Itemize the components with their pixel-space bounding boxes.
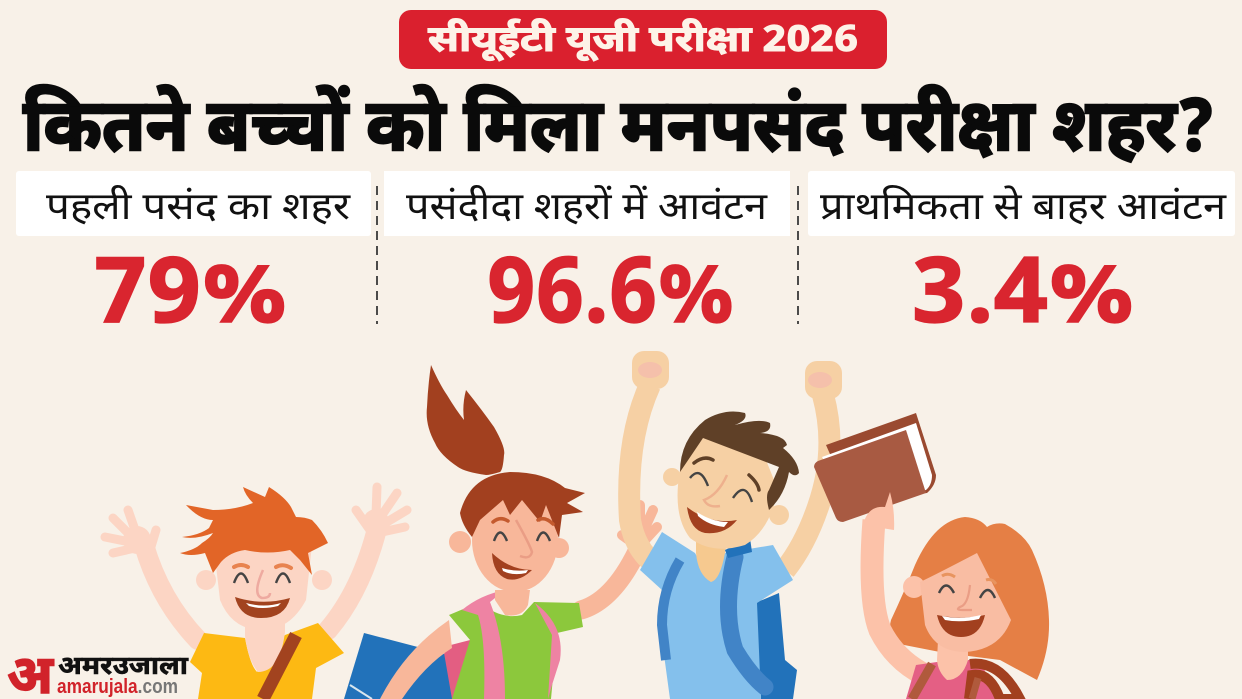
- stat: allotted outside priority: [808, 171, 1235, 360]
- title: कितने बच्चों को मिला मनपसंद परीक्षा शहर?: [23, 85, 1215, 180]
- logo: Amar Ujala: [7, 646, 189, 699]
- stat: allotted preferred cities: पसंदीदा शहरों में आवंटन: [406, 184, 768, 235]
- illustration: boy with orange hair: [105, 487, 407, 699]
- illustration: girl with orange hair and pink top: [863, 492, 1049, 699]
- illustration: girl with ponytail and green shirt: [344, 365, 657, 699]
- stat: first choice city: पहली पसंद का शहर: [46, 184, 352, 235]
- logo: Amar Ujala: अमरउजाला: [58, 651, 189, 685]
- stat: allotted outside priority: प्राथमिकता से बाहर आवंटन: [820, 184, 1227, 235]
- illustration: boy with dark hair and backpack: [629, 351, 842, 699]
- stat: allotted outside priority: 3.4%: [912, 241, 1135, 360]
- stat: first choice city: [16, 171, 371, 360]
- stat: allotted preferred cities: 96.6%: [487, 241, 735, 360]
- illustration: book: [814, 413, 936, 522]
- logo: Amar Ujala: amarujala.com: [57, 676, 178, 698]
- header pill: exam name: [399, 10, 887, 69]
- header pill: exam name: सीयूईटी यूजी परीक्षा 2026: [428, 18, 858, 66]
- stat: first choice city: 79%: [93, 241, 288, 360]
- stat: allotted preferred cities: [384, 171, 790, 360]
